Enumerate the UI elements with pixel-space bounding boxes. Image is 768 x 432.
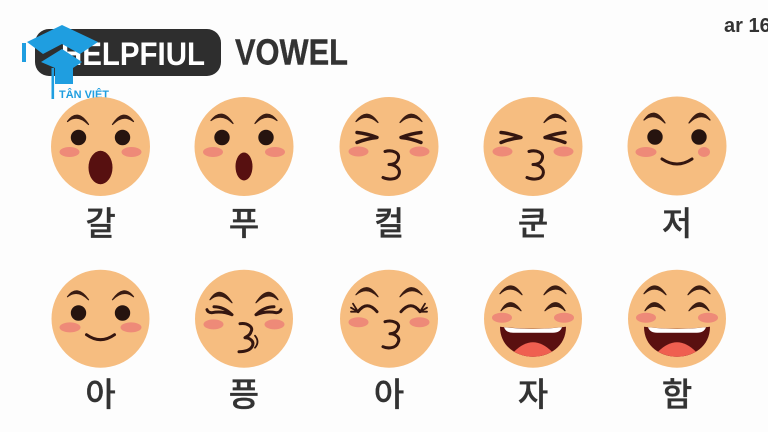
face 7: lashes and side kiss [195,270,293,368]
face 8: lashes and kiss [340,270,438,368]
label 아: 아 [374,376,404,413]
title word: VOWEL: VOWEL [235,32,348,72]
label 저: 저 [662,205,692,242]
icon: pole [52,68,54,99]
label 푸: 푸 [229,205,259,242]
face 1: wide open mouth [51,97,150,196]
icon: arrow [41,49,82,84]
face 9: big laugh [484,270,582,368]
label 컬: 컬 [374,205,404,242]
title pill: HELPFIUL [35,29,221,76]
logo: Tan Viet [24,25,109,101]
label 함: 함 [662,376,692,413]
face 2: small open mouth [194,97,294,196]
face 10: big laugh [628,270,726,368]
label 쿤: 쿤 [518,205,548,242]
label 갈: 갈 [85,205,116,242]
label 자: 자 [518,376,548,413]
face 4: squint kiss, single brow [484,97,582,196]
label 아: 아 [85,376,116,413]
icon: tassel [22,43,26,62]
label 픙: 픙 [229,376,259,413]
face 5: small smile [628,96,726,196]
title pill: HELPFIUL: HELPFIUL [61,36,205,72]
face 3: squint kiss [340,97,438,196]
logo text: TÂN VIỆT [59,88,109,101]
face 6: smile [52,270,150,368]
icon: graduation cap [27,25,98,54]
